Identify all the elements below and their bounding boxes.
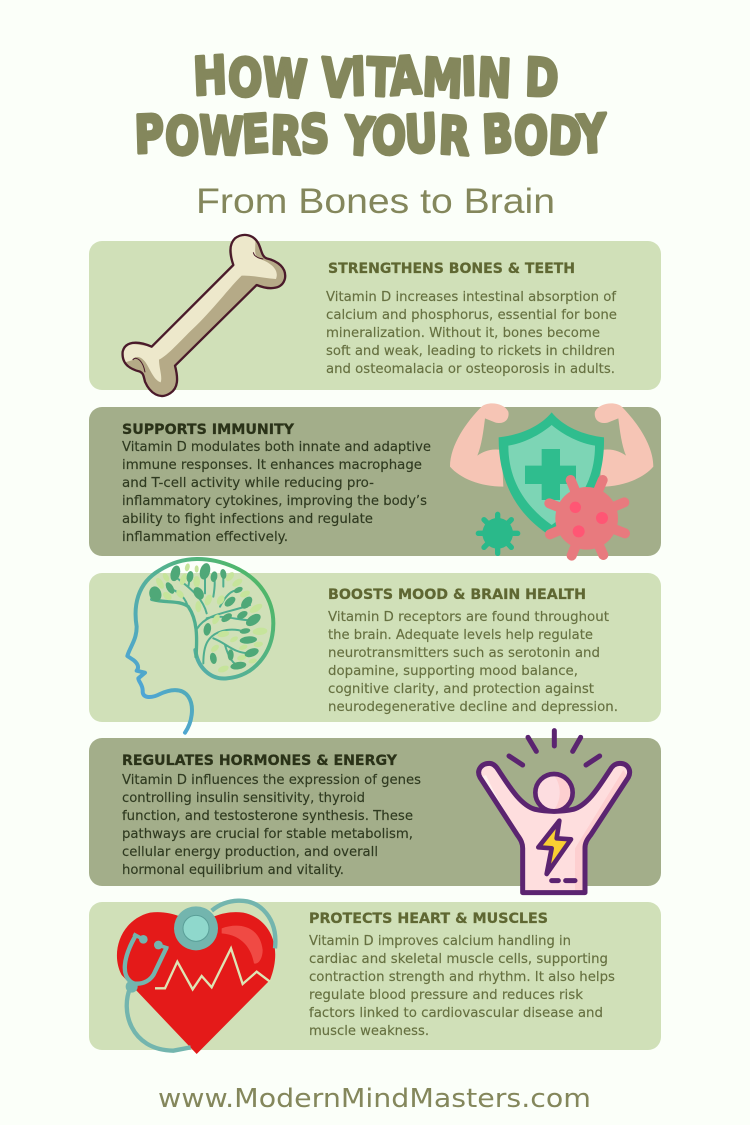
text block: protects heart and muscles: Vitamin D improves calcium handling in: [309, 934, 571, 949]
text block: supports immunity: inflammation effectively.: [122, 530, 288, 545]
panel: supports immunity: [89, 403, 661, 556]
text block: regulates hormones and energy: function, and testosterone synthesis. These: [122, 809, 413, 824]
heading: supports immunity: SUPPORTS IMMUNITY: [122, 422, 295, 438]
text block: boosts mood and brain health: dopamine, supporting mood balance,: [328, 664, 578, 679]
panel: strengthens bones and teeth: [89, 232, 661, 396]
text block: boosts mood and brain health: neurodegenerative decline and depression.: [328, 700, 618, 715]
text block: boosts mood and brain health: Vitamin D receptors are found throughout: [328, 610, 609, 625]
icon: bone: [117, 232, 285, 396]
heading: boosts mood and brain health: BOOSTS MOOD & BRAIN HEALTH: [328, 587, 586, 603]
text block: strengthens bones and teeth: and osteomalacia or osteoporosis in adults.: [326, 362, 615, 377]
title: POWERS YOUR BODY: [133, 104, 609, 168]
text block: boosts mood and brain health: cognitive clarity, and protection against: [328, 682, 594, 697]
title: HOW VITAMIN D: [192, 46, 560, 110]
panel: regulates hormones and energy: [89, 731, 661, 893]
text block: strengthens bones and teeth: mineralization. Without it, bones become: [326, 326, 600, 341]
heading: strengthens bones and teeth: STRENGTHENS BONES & TEETH: [328, 261, 575, 277]
text block: regulates hormones and energy: controlling insulin sensitivity, thyroid: [122, 791, 365, 806]
text block: protects heart and muscles: factors linked to cardiovascular disease and: [309, 1006, 603, 1021]
text block: boosts mood and brain health: neurotransmitters such as serotonin and: [328, 646, 600, 661]
text block: supports immunity: immune responses. It enhances macrophage: [122, 458, 422, 473]
text block: protects heart and muscles: muscle weakness.: [309, 1024, 429, 1039]
subtitle: From Bones to Brain: [196, 182, 555, 221]
text block: strengthens bones and teeth: calcium and phosphorus, essential for bone: [326, 308, 617, 323]
footer website: www.ModernMindMasters.com: [158, 1084, 591, 1114]
text block: strengthens bones and teeth: soft and weak, leading to rickets in children: [326, 344, 615, 359]
icon: energized person: [479, 731, 630, 893]
text block: regulates hormones and energy: pathways are crucial for stable metabolism,: [122, 827, 413, 842]
text block: supports immunity: inflammatory cytokines, improving the body’s: [122, 494, 427, 509]
icon: head with tree brain: [127, 559, 273, 733]
text block: protects heart and muscles: [309, 934, 615, 1039]
text block: protects heart and muscles: regulate blood pressure and reduces risk: [309, 988, 583, 1003]
text block: regulates hormones and energy: Vitamin D influences the expression of genes: [122, 773, 421, 788]
heading: protects heart and muscles: PROTECTS HEART & MUSCLES: [309, 911, 548, 927]
text block: protects heart and muscles: cardiac and skeletal muscle cells, supporting: [309, 952, 608, 967]
text block: boosts mood and brain health: the brain. Adequate levels help regulate: [328, 628, 593, 643]
text block: supports immunity: Vitamin D modulates both innate and adaptive: [122, 440, 431, 455]
text block: supports immunity: and T-cell activity while reducing pro-: [122, 476, 374, 491]
text block: supports immunity: [122, 440, 431, 545]
text block: regulates hormones and energy: hormonal equilibrium and vitality.: [122, 863, 344, 878]
icon: immunity shield with virus: [450, 403, 653, 556]
heading: regulates hormones and energy: REGULATES HORMONES & ENERGY: [122, 753, 398, 769]
panel: boosts mood and brain health: [89, 559, 661, 733]
text block: supports immunity: ability to fight infections and regulate: [122, 512, 373, 527]
panel: protects heart and muscles: [89, 901, 661, 1054]
icon: heart with stethoscope: [117, 901, 275, 1054]
text block: regulates hormones and energy: [122, 773, 421, 878]
text block: protects heart and muscles: contraction strength and rhythm. It also helps: [309, 970, 615, 985]
text block: strengthens bones and teeth: [326, 290, 617, 377]
text block: boosts mood and brain health: [328, 610, 618, 715]
text block: strengthens bones and teeth: Vitamin D increases intestinal absorption of: [326, 290, 616, 305]
text block: regulates hormones and energy: cellular energy production, and overall: [122, 845, 378, 860]
title: [133, 46, 609, 168]
